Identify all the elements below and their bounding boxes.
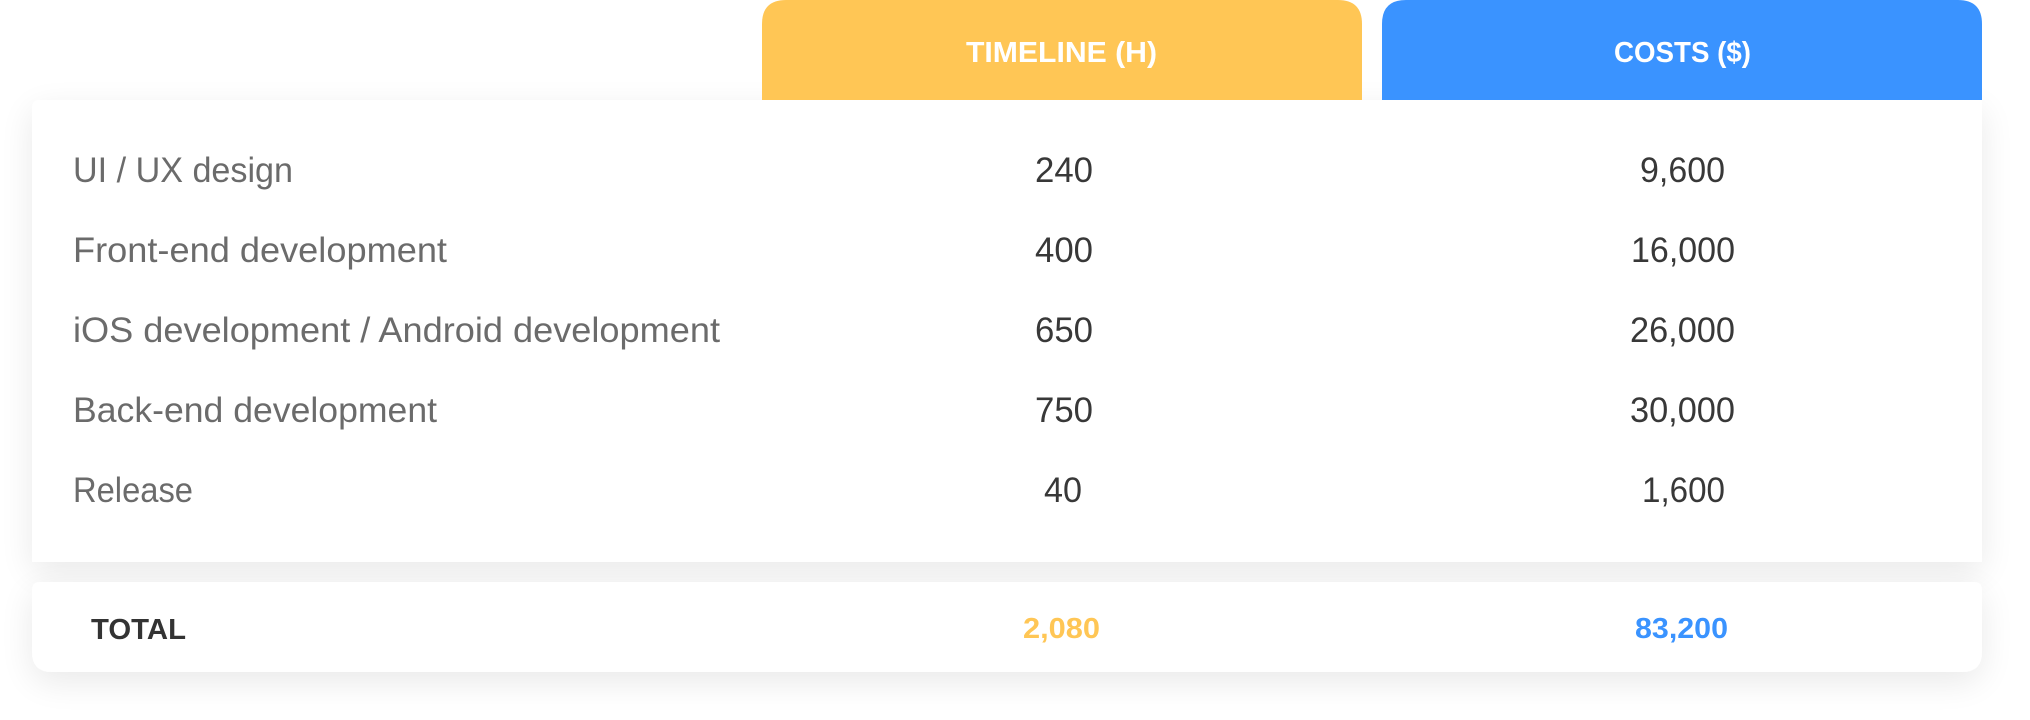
timeline values: 400 <box>1035 231 1093 270</box>
timeline values <box>1035 151 1093 510</box>
panel: main table body <box>32 100 1982 562</box>
total costs: 83,200 <box>1635 613 1728 645</box>
header: timeline: TIMELINE (H) <box>966 37 1157 69</box>
total label: TOTAL <box>91 614 186 646</box>
row label: Release: Release <box>73 471 193 510</box>
cost values: 16,000 <box>1631 231 1735 270</box>
cost values: 30,000 <box>1630 391 1735 430</box>
timeline values: 750 <box>1035 391 1093 430</box>
header: costs <box>1382 0 1982 100</box>
header: costs: COSTS ($) <box>1614 37 1751 69</box>
cost values: 9,600 <box>1640 151 1725 190</box>
row label: Back-end development: Back-end development <box>73 391 437 430</box>
cost values <box>1630 151 1735 510</box>
row label: iOS development / Android development: iOS development / Android development <box>73 311 720 350</box>
row label: Front-end development: Front-end development <box>73 231 447 270</box>
header: timeline <box>762 0 1362 100</box>
timeline values: 240 <box>1035 151 1093 190</box>
cost values: 26,000 <box>1630 311 1735 350</box>
timeline values: 650 <box>1035 311 1093 350</box>
panel: total row <box>32 582 1982 672</box>
row label: UI / UX design: UI / UX design <box>73 151 293 190</box>
cost values: 1,600 <box>1642 471 1725 510</box>
timeline values: 40 <box>1044 471 1082 510</box>
total timeline: 2,080 <box>1023 613 1100 645</box>
